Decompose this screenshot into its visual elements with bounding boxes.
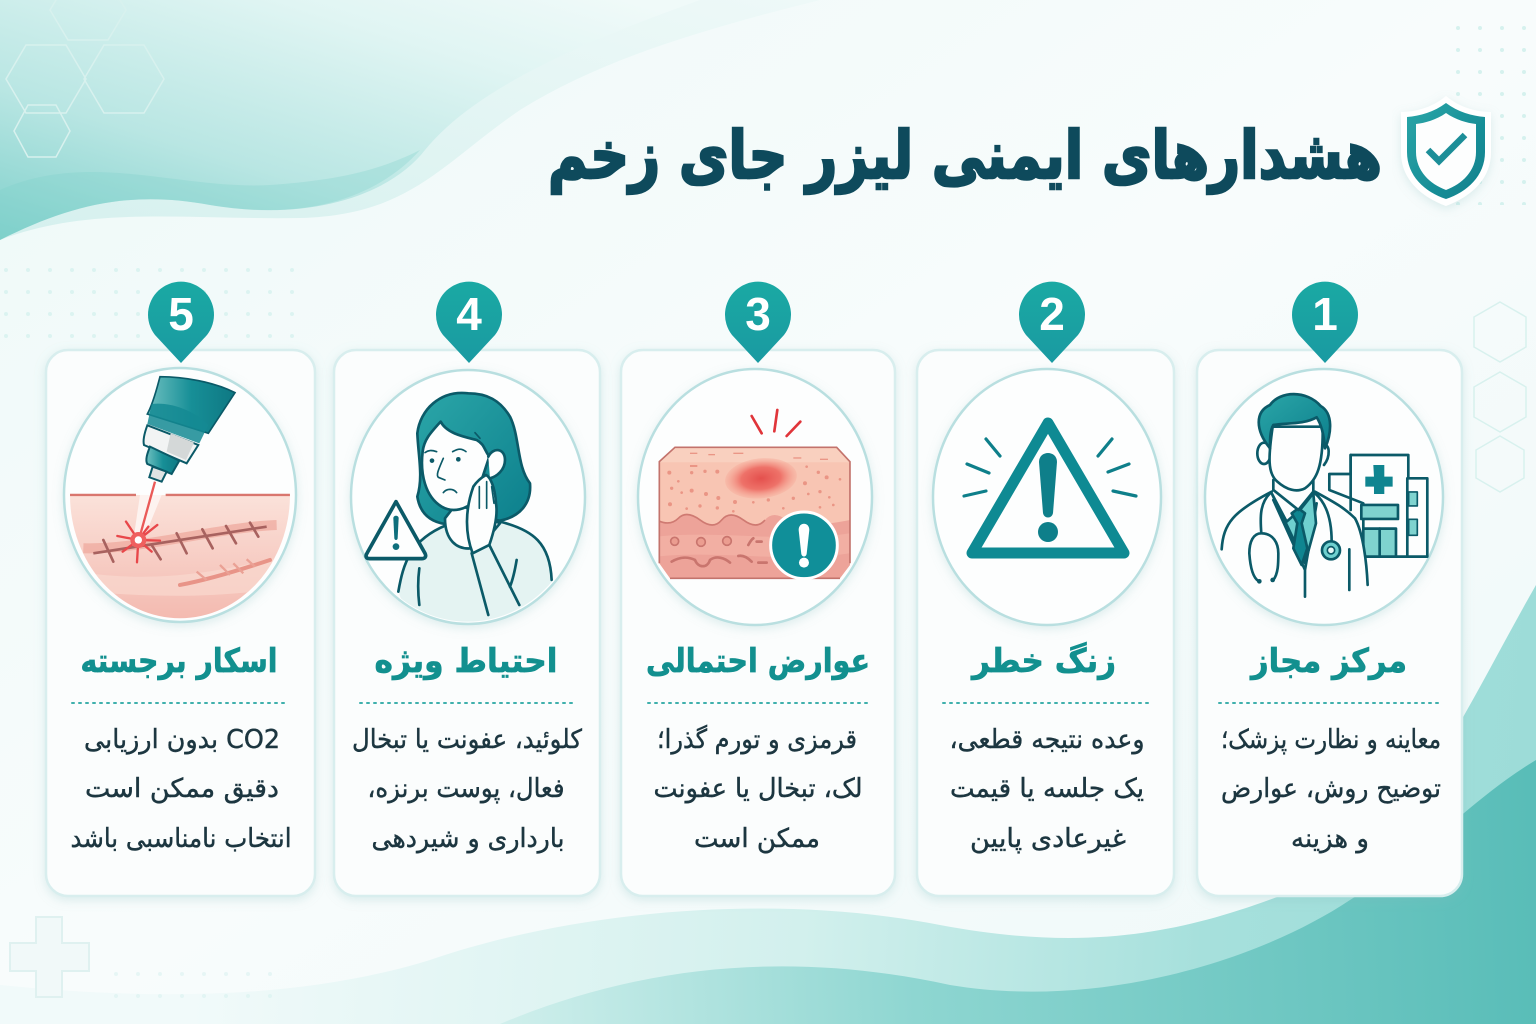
body text 5 <box>70 725 292 854</box>
number pin 4: 4 <box>456 288 482 340</box>
panel: card 3 side effects <box>621 350 895 896</box>
heading 2: زنگ خطر <box>970 641 1116 681</box>
panel: card 2 red flags <box>917 350 1174 896</box>
body text 4: کلوئید، عفونت یا تبخال <box>352 725 583 755</box>
number pin 3: 3 <box>745 288 771 340</box>
disc 4 <box>351 370 585 624</box>
number pin 2: 2 <box>1039 288 1065 340</box>
disc 2 <box>933 369 1161 625</box>
number pin 4 <box>436 282 502 363</box>
number pin 3 <box>725 282 791 363</box>
icon: inflamed skin section <box>657 410 853 582</box>
body text 5: انتخاب نامناسبی باشد <box>70 824 292 854</box>
body text 4: بارداری و شیردهی <box>372 824 564 854</box>
body text 5: CO2 بدون ارزیابی <box>84 725 280 755</box>
number pin 1: 1 <box>1312 288 1338 340</box>
icon: laser on scar <box>67 377 293 625</box>
number pin 5: 5 <box>168 288 194 340</box>
body text 1: و هزینه <box>1291 824 1369 854</box>
heading 5: اسکار برجسته <box>80 641 278 681</box>
body text 2: یک جلسه یا قیمت <box>950 774 1144 804</box>
heading 3: عوارض احتمالی <box>646 641 870 681</box>
body text 2: وعده نتیجه قطعی، <box>950 725 1144 755</box>
body text 5: دقیق ممکن است <box>85 774 279 804</box>
body text 4 <box>352 725 583 854</box>
heading 4: احتیاط ویژه <box>374 641 558 681</box>
heading 1: مرکز مجاز <box>1249 641 1407 681</box>
icon: warning triangle <box>964 423 1136 553</box>
icon: doctor and hospital <box>1222 394 1427 598</box>
number pin 1 <box>1292 282 1358 363</box>
disc 5 <box>64 368 296 622</box>
body text 4: فعال، پوست برنزه، <box>368 774 564 804</box>
body text 2 <box>950 725 1144 854</box>
panel: card 5 raised scar <box>46 350 315 896</box>
icon: shield with check <box>1401 96 1491 206</box>
number pin 2 <box>1019 282 1085 363</box>
body text 2: غیرعادی پایین <box>970 824 1126 854</box>
body text 3: قرمزی و تورم گذرا؛ <box>657 724 857 755</box>
body text 1: معاینه و نظارت پزشک؛ <box>1221 725 1441 755</box>
body text 1 <box>1221 725 1441 854</box>
body text 3: ممکن است <box>694 824 820 854</box>
disc 3 <box>638 369 872 625</box>
body text 3 <box>654 724 862 854</box>
disc 1 <box>1205 369 1443 625</box>
panel: card 1 authorized center <box>1197 350 1462 896</box>
body text 3: لک، تبخال یا عفونت <box>654 774 862 804</box>
icon: worried woman with warning <box>366 393 553 623</box>
number pin 5 <box>148 282 214 363</box>
body text 1: توضیح روش، عوارض <box>1221 774 1441 804</box>
panel: card 4 special caution <box>334 350 600 896</box>
